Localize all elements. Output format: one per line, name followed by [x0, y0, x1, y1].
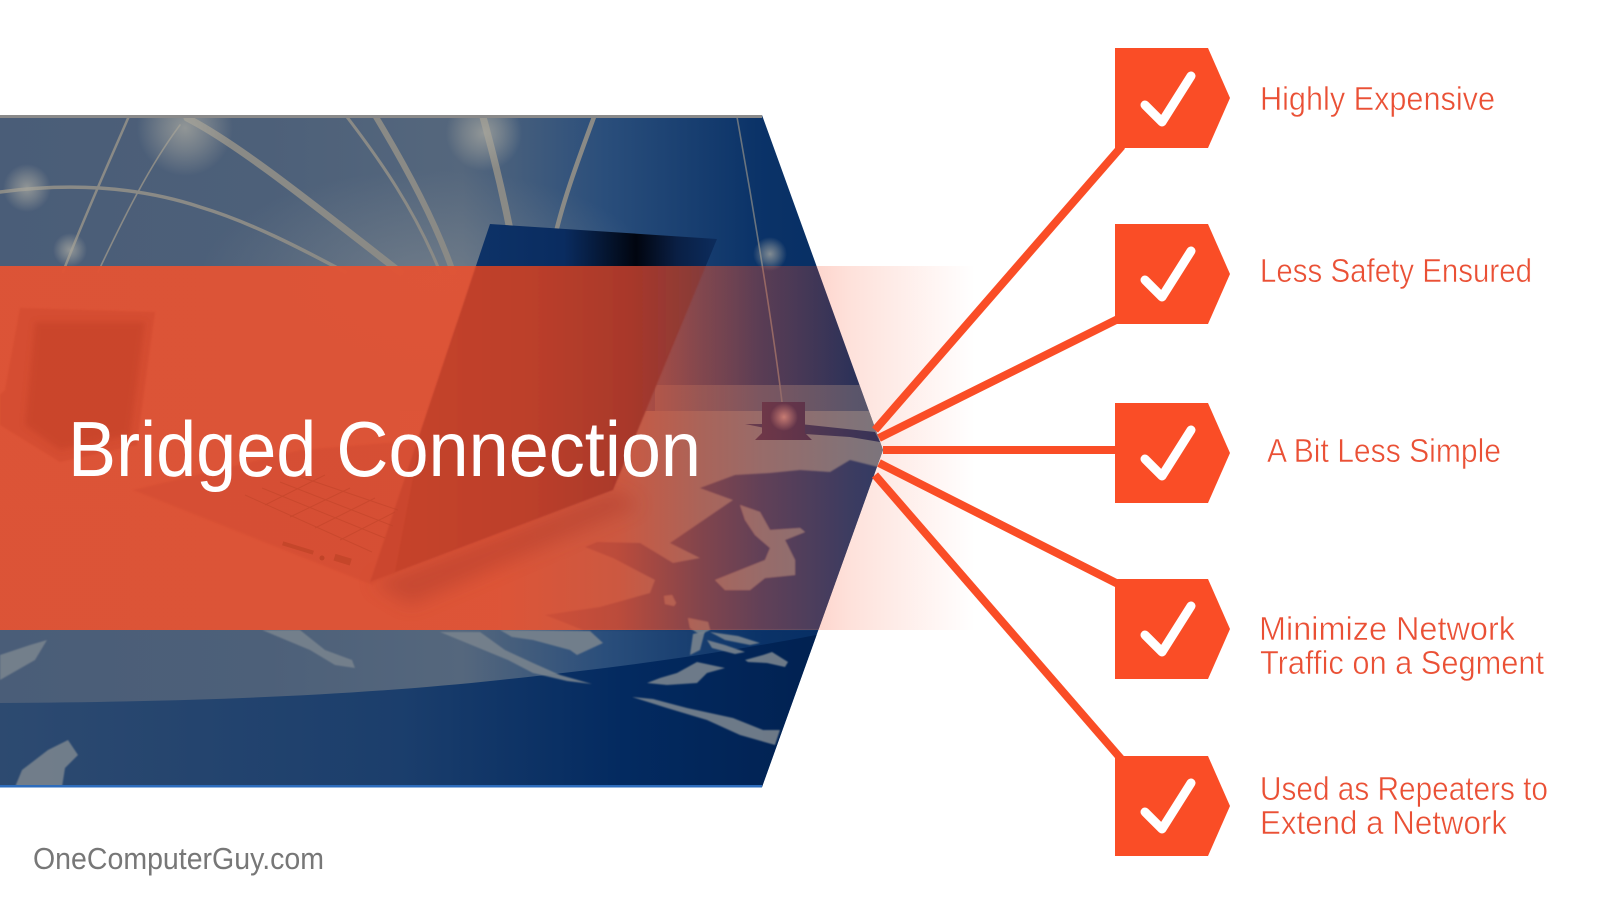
item 2: check badge: [1115, 224, 1230, 324]
photo panel: laptops on world map: [0, 80, 895, 787]
band: title ribbon fading to transparent: [0, 266, 975, 630]
connector rays: [875, 146, 1122, 760]
photo top edge: [0, 115, 762, 118]
photo bottom edge: [0, 785, 762, 788]
item 1: check badge: [1115, 48, 1230, 148]
item 4 label: Traffic on a Segment: [1260, 645, 1545, 682]
item 2 label: Less Safety Ensured: [1260, 253, 1532, 290]
item 4: check badge: [1115, 579, 1230, 679]
item 5: check badge: [1115, 756, 1230, 856]
item 5 label: [1260, 771, 1548, 842]
watermark: OneComputerGuy.com: [33, 841, 324, 876]
item 3: check badge: [1115, 403, 1230, 503]
item 1 label: Highly Expensive: [1260, 81, 1495, 118]
laptop details under the ribbon: [0, 224, 717, 605]
item 4 label: [1259, 611, 1545, 682]
item 3 label: A Bit Less Simple: [1267, 433, 1501, 470]
item 5 label: Extend a Network: [1260, 805, 1507, 842]
title: Bridged Connection: [68, 405, 701, 493]
item 5 label: Used as Repeaters to: [1260, 771, 1548, 808]
item 4 label: Minimize Network: [1259, 611, 1515, 648]
